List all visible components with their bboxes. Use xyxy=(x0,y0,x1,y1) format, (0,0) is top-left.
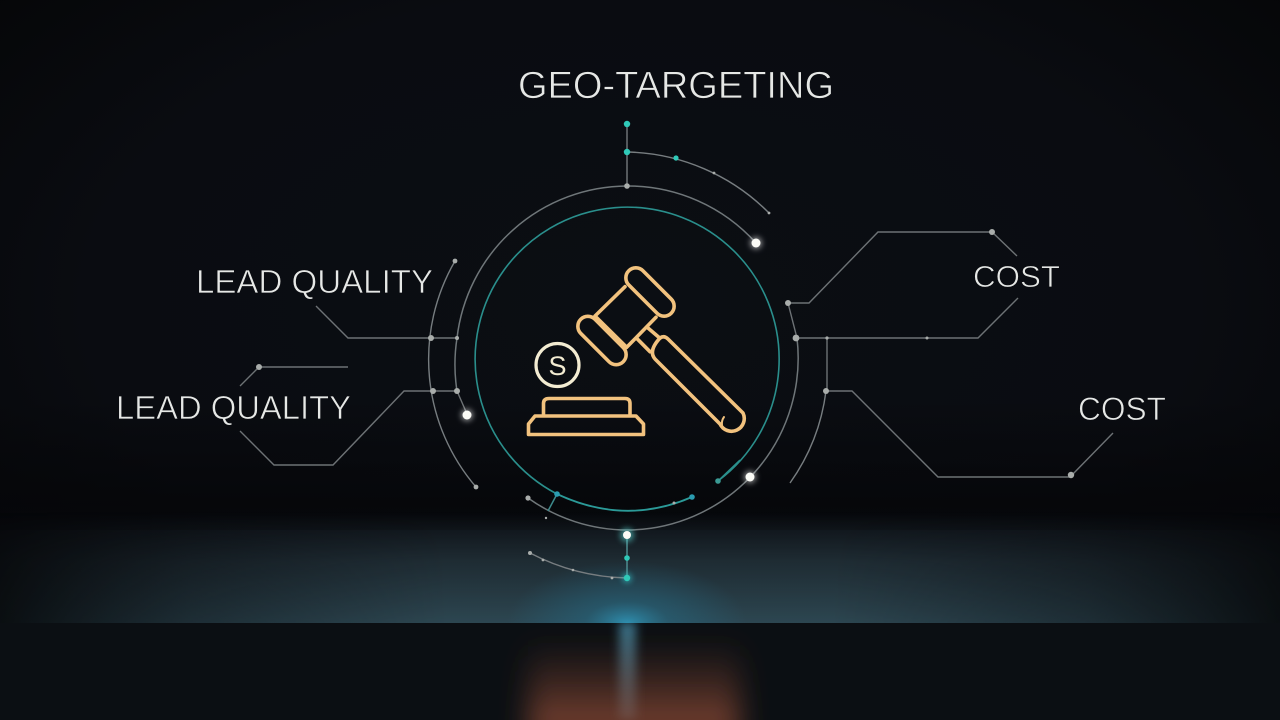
icon: gavel xyxy=(528,264,744,434)
sound block xyxy=(544,398,630,414)
connector lines: vertical stems xyxy=(548,124,740,578)
label: cost upper: COST xyxy=(973,259,1060,294)
grey nodes xyxy=(256,172,1074,579)
label: cost lower: COST xyxy=(1078,391,1166,427)
label: lead quality upper: LEAD QUALITY xyxy=(196,263,433,300)
orbit arcs xyxy=(429,152,826,578)
sound block base xyxy=(528,416,644,434)
teal nodes xyxy=(554,121,721,581)
gavel upper pad xyxy=(622,264,678,320)
floor glow: teal horizon band xyxy=(0,512,1280,623)
gavel head body xyxy=(595,287,656,347)
nodes xyxy=(256,121,1074,581)
icon: dollar coin: S xyxy=(548,351,567,381)
connector lines: left xyxy=(240,306,467,465)
connector lines: right xyxy=(788,232,1113,477)
gavel handle end xyxy=(722,417,724,425)
icon: dollar coin xyxy=(536,344,579,386)
gavel lower pad xyxy=(574,312,630,369)
title: geo-targeting: GEO-TARGETING xyxy=(518,65,834,107)
white nodes xyxy=(462,238,760,539)
central ring: teal xyxy=(475,207,779,511)
label: lead quality lower: LEAD QUALITY xyxy=(116,389,351,426)
central ring: grey outer xyxy=(455,186,798,530)
gavel handle xyxy=(637,328,744,431)
floor reflection: orange and blue xyxy=(528,622,740,720)
white node glows xyxy=(461,237,762,583)
